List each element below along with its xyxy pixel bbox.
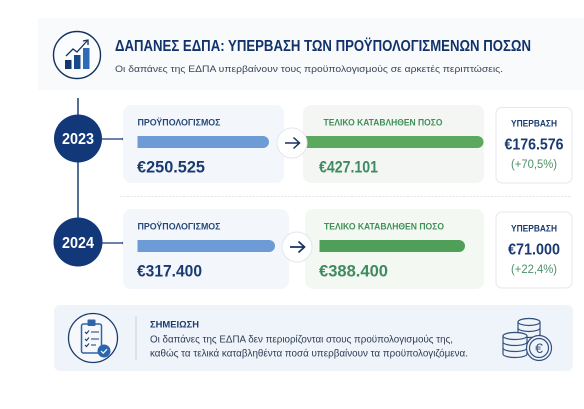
year badge 2024 (54, 218, 128, 266)
icon: coins (503, 318, 552, 360)
excess box 2024: €71.000 (508, 242, 560, 258)
paid card 2023 (300, 105, 484, 183)
arrow 2023 (277, 128, 307, 158)
budget card 2024: ΠΡΟΫΠΟΛΟΓΙΣΜΟΣ (138, 222, 221, 232)
note text: Οι δαπάνες της ΕΔΠΑ δεν περιορίζονται στους προϋπολογισμούς της, (150, 334, 453, 346)
budget card 2023: €250.525 (137, 158, 205, 176)
budget card 2023 (123, 105, 284, 183)
note text: καθώς τα τελικά καταβληθέντα ποσά υπερβαίνουν τα προϋπολογιζόμενα. (150, 348, 468, 360)
budget card 2024 (123, 209, 289, 289)
subtitle: Οι δαπάνες της ΕΔΠΑ υπερβαίνουν τους προϋπολογισμούς σε αρκετές περιπτώσεις. (115, 64, 503, 75)
excess box 2024 (496, 212, 572, 288)
excess box 2024: (+22,4%) (511, 264, 557, 276)
icon: growth chart (54, 32, 100, 78)
row 2023 (54, 105, 572, 183)
excess box 2023 (496, 108, 572, 183)
paid card 2024: €388.400 (319, 262, 388, 280)
year badge 2023 (54, 114, 128, 162)
note panel (54, 305, 573, 371)
paid card 2024: ΤΕΛΙΚΟ ΚΑΤΑΒΛΗΘΕΝ ΠΟΣΟ (324, 222, 444, 232)
timeline line (77, 98, 79, 218)
note text (150, 334, 468, 360)
header band (38, 18, 584, 90)
year badge 2023: 2023 (62, 131, 94, 148)
icon: clipboard (68, 314, 118, 362)
excess box 2023: €176.576 (504, 136, 564, 154)
budget card 2023: ΠΡΟΫΠΟΛΟΓΙΣΜΟΣ (138, 118, 221, 128)
year badge 2024: 2024 (62, 235, 94, 252)
icon: coins: € (535, 340, 543, 356)
excess box 2024: ΥΠΕΡΒΑΣΗ (511, 224, 557, 234)
note heading: ΣΗΜΕΙΩΣΗ (150, 320, 199, 330)
budget card 2024: €317.400 (137, 262, 202, 280)
excess box 2023: ΥΠΕΡΒΑΣΗ (511, 118, 557, 130)
row 2024 (54, 209, 572, 289)
paid card 2023: ΤΕΛΙΚΟ ΚΑΤΑΒΛΗΘΕΝ ΠΟΣΟ (324, 118, 442, 128)
excess box 2023: (+70,5%) (511, 159, 557, 171)
paid card 2023: €427.101 (319, 158, 378, 176)
arrow 2024 (282, 232, 312, 262)
paid card 2024 (305, 209, 484, 289)
